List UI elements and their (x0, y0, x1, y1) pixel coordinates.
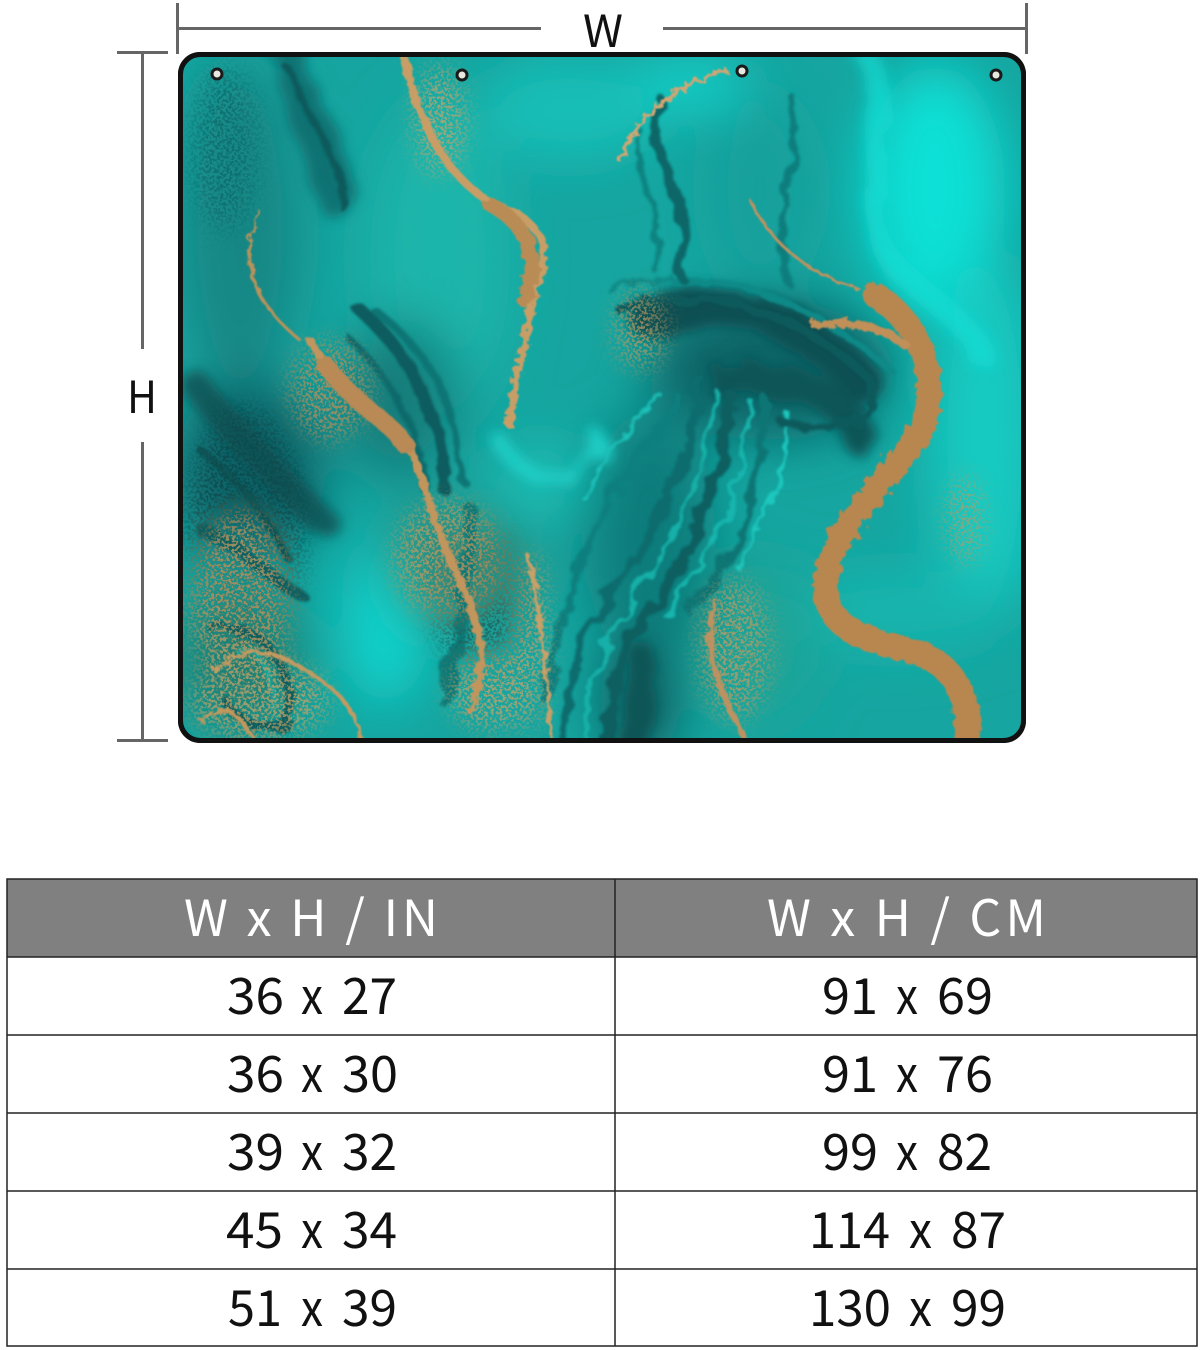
row 4: 45 (226, 1191, 283, 1263)
dark speckle dust (190, 70, 525, 670)
row 5: 39 (342, 1269, 397, 1341)
row 5: x (909, 1269, 932, 1341)
soft flows (200, 30, 985, 770)
row 3: 82 (937, 1113, 992, 1185)
row 3: 32 (342, 1113, 397, 1185)
table header (7, 879, 1197, 957)
row 4 (226, 1191, 1006, 1263)
gold speckle dust (190, 65, 983, 740)
row 2 (227, 1035, 993, 1107)
row 3: x (301, 1113, 323, 1185)
width dimension arrow (176, 3, 1028, 54)
table grid (7, 879, 1197, 1346)
height dimension arrow (117, 51, 168, 742)
row 5 (228, 1269, 1006, 1341)
row 5: 99 (951, 1269, 1006, 1341)
row 4: x (301, 1191, 323, 1263)
row 1: x (896, 957, 918, 1029)
row 4: 34 (342, 1191, 397, 1263)
row 2: 76 (937, 1035, 993, 1107)
grommets (212, 66, 1001, 80)
row 2: 36 (227, 1035, 284, 1107)
table header: W x H / CM (767, 879, 1046, 951)
size table (7, 879, 1197, 1346)
blanket with marble pattern (170, 30, 1040, 770)
row 3: x (896, 1113, 918, 1185)
row 1: 91 (822, 957, 878, 1029)
row 1: x (301, 957, 323, 1029)
row 3: 39 (227, 1113, 284, 1185)
row 5: x (301, 1269, 323, 1341)
row 1: 36 (227, 957, 284, 1029)
row 1: 69 (937, 957, 993, 1029)
row 5: 51 (228, 1269, 282, 1341)
row 3 (227, 1113, 992, 1185)
thin swirl streaks (200, 70, 890, 770)
row 1 (227, 957, 993, 1029)
row 5: 130 (809, 1269, 891, 1341)
table header: W x H / IN (184, 879, 438, 951)
row 2: 30 (342, 1035, 398, 1107)
row 2: x (896, 1035, 918, 1107)
row 4: 114 (809, 1191, 890, 1263)
row 4: x (909, 1191, 932, 1263)
row 2: x (301, 1035, 323, 1107)
height label: H (127, 362, 157, 426)
row 4: 87 (951, 1191, 1006, 1263)
gold veins (200, 60, 969, 770)
row 3: 99 (822, 1113, 878, 1185)
row 1: 27 (342, 957, 397, 1029)
row 2: 91 (822, 1035, 878, 1107)
